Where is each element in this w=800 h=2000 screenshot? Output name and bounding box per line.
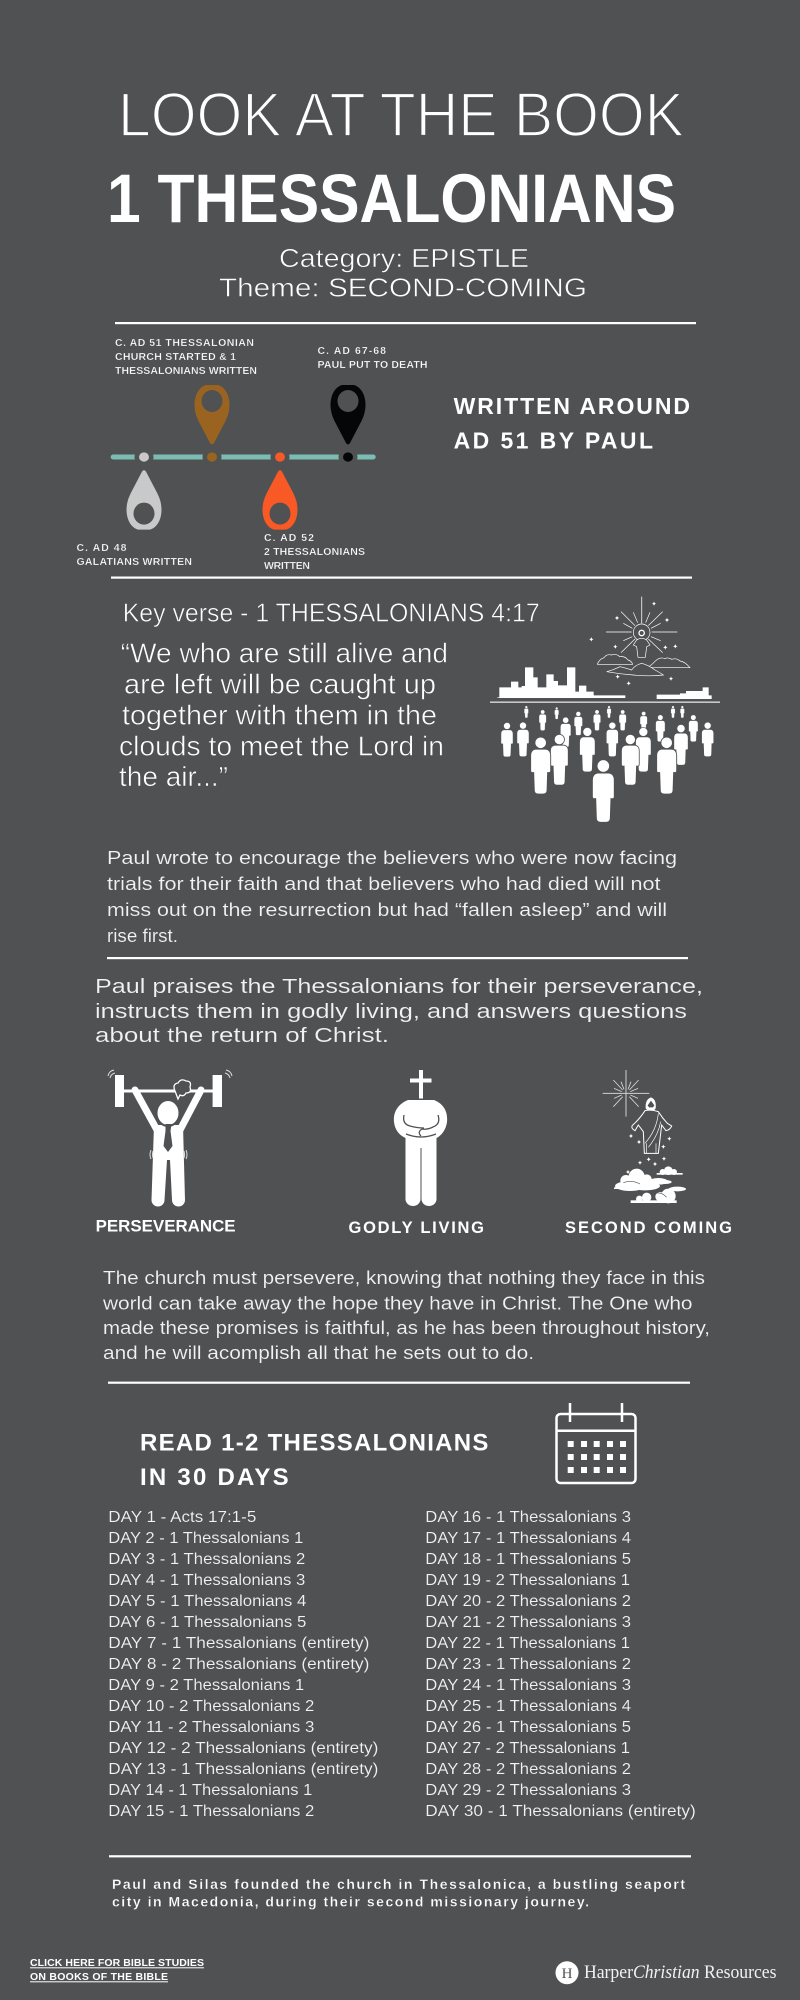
callout: written around AD 51	[454, 393, 690, 454]
reading plan: days 1 to 15: DAY 9 - 2 Thessalonians 1	[108, 1677, 304, 1694]
text: Paul and Silas founded the church: Paul and Silas founded the church in Thessalonica, a bustling seaport	[112, 1876, 685, 1892]
reading plan: days 16 to 30	[425, 1509, 696, 1820]
icon: praying figure with a cross for a head	[394, 1070, 447, 1206]
reading plan: days 1 to 15: DAY 10 - 2 Thessalonians 2	[108, 1698, 314, 1715]
label: godly living: GODLY LIVING	[348, 1219, 484, 1237]
reading plan: days 1 to 15	[108, 1509, 378, 1820]
panel: godly living	[348, 1070, 484, 1237]
reading plan: days 1 to 15: DAY 11 - 2 Thessalonians 3	[108, 1719, 314, 1736]
subtitle: category and theme: Theme: SECOND-COMING	[219, 272, 587, 302]
label: AD 52: 2 THESSALONIANS	[264, 546, 365, 558]
key verse quote: the air...”	[119, 761, 228, 792]
text: the church must persevere: The church must persevere, knowing that nothing they face in this	[103, 1268, 705, 1288]
text: Paul praises the Thessalonians: Paul praises the Thessalonians for their perseverance,	[95, 975, 703, 998]
reading plan: days 1 to 15: DAY 14 - 1 Thessalonians 1	[108, 1782, 312, 1799]
icon: Christ with sun rays and clouds	[597, 597, 690, 676]
text: Paul and Silas founded the church	[112, 1876, 685, 1910]
key verse quote: are left will be caught up	[124, 669, 436, 700]
label: AD 51: CHURCH STARTED & 1	[115, 351, 236, 363]
label: AD 48	[76, 542, 192, 568]
icon: city skyline	[490, 667, 720, 703]
link: click here for Bible studies: CLICK HERE FOR BIBLE STUDIES	[30, 1957, 204, 1969]
reading plan: days 16 to 30: DAY 25 - 1 Thessalonians 4	[425, 1698, 631, 1715]
reading plan: days 1 to 15: DAY 1 - Acts 17:1-5	[108, 1509, 256, 1526]
reading plan: days 16 to 30: DAY 16 - 1 Thessalonians 3	[425, 1509, 631, 1526]
text: why Paul wrote	[107, 848, 677, 946]
text: the church must persevere: world can take away the hope they have in Christ. The One who	[102, 1293, 692, 1313]
reading plan: days 16 to 30: DAY 17 - 1 Thessalonians 4	[425, 1530, 631, 1547]
label: AD 48: GALATIANS WRITTEN	[76, 556, 192, 568]
icon: Christ descending over clouds with a star	[603, 1070, 686, 1203]
title: look at the book: LOOK AT THE BOOK	[118, 81, 684, 150]
reading plan: days 1 to 15: DAY 6 - 1 Thessalonians 5	[108, 1614, 306, 1631]
subtitle: category and theme	[219, 243, 587, 302]
label: AD 67-68	[318, 345, 428, 371]
timeline bar with date dots	[111, 448, 376, 466]
reading plan: days 1 to 15: DAY 2 - 1 Thessalonians 1	[108, 1530, 303, 1547]
reading plan: days 16 to 30: DAY 23 - 1 Thessalonians 2	[425, 1656, 631, 1673]
icon: man lifting a barbell	[108, 1070, 232, 1206]
heading: read in 30 days: READ 1-2 THESSALONIANS	[140, 1430, 488, 1457]
heading: read in 30 days	[140, 1430, 488, 1491]
pin: AD 51 brown	[194, 385, 230, 444]
icon: crowd of people	[501, 706, 714, 822]
label: AD 51	[115, 337, 257, 377]
text: Paul praises the Thessalonians: instructs them in godly living, and answers questions	[95, 1000, 687, 1023]
reading plan: days 16 to 30: DAY 29 - 2 Thessalonians 3	[425, 1782, 631, 1799]
label: AD 67-68: PAUL PUT TO DEATH	[318, 359, 428, 371]
reading plan: days 16 to 30: DAY 22 - 1 Thessalonians 1	[425, 1635, 630, 1652]
label: AD 52: C. AD 52	[264, 532, 314, 544]
text: why Paul wrote: rise first.	[107, 926, 178, 946]
key verse heading: Key verse - 1 THESSALONIANS 4:17	[123, 598, 540, 628]
reading plan: days 1 to 15: DAY 5 - 1 Thessalonians 4	[108, 1593, 306, 1610]
reading plan: days 16 to 30: DAY 28 - 2 Thessalonians 2	[425, 1761, 631, 1778]
text: the church must persevere: and he will acomplish all that he sets out to do.	[103, 1343, 534, 1363]
text: why Paul wrote: trials for their faith and that believers who had died will not	[107, 874, 660, 894]
timeline chart	[76, 337, 428, 572]
reading plan: days 1 to 15: DAY 13 - 1 Thessalonians (entirety)	[108, 1761, 378, 1778]
reading plan: days 16 to 30: DAY 18 - 1 Thessalonians 5	[425, 1551, 631, 1568]
label: perseverance: PERSEVERANCE	[96, 1218, 236, 1236]
label: AD 67-68: C. AD 67-68	[318, 345, 386, 357]
reading plan: days 1 to 15: DAY 12 - 2 Thessalonians (entirety)	[108, 1740, 378, 1757]
text: why Paul wrote: Paul wrote to encourage the believers who were now facing	[107, 848, 677, 868]
reading plan: days 16 to 30: DAY 21 - 2 Thessalonians 3	[425, 1614, 631, 1631]
text: Paul praises the Thessalonians	[95, 975, 703, 1047]
panel: perseverance	[96, 1070, 236, 1236]
reading plan: days 16 to 30: DAY 20 - 2 Thessalonians 2	[425, 1593, 631, 1610]
reading plan: days 16 to 30: DAY 19 - 2 Thessalonians 1	[425, 1572, 630, 1589]
key verse quote: “We who are still alive and	[121, 638, 448, 669]
pin: AD 48 gray	[126, 470, 162, 530]
text: Paul and Silas founded the church: city in Macedonia, during their second missionary journey.	[112, 1894, 589, 1910]
text: Paul praises the Thessalonians: about the return of Christ.	[95, 1024, 389, 1047]
link: click here for Bible studies: ON BOOKS OF THE BIBLE	[30, 1971, 168, 1983]
reading plan: days 1 to 15: DAY 8 - 2 Thessalonians (entirety)	[108, 1656, 369, 1673]
label: AD 52	[264, 532, 365, 572]
text: the church must persevere: made these promises is faithful, as he has been throughout history,	[103, 1318, 710, 1338]
key verse quote	[119, 638, 448, 792]
reading plan: days 16 to 30: DAY 27 - 2 Thessalonians 1	[425, 1740, 630, 1757]
label: AD 51: THESSALONIANS WRITTEN	[115, 365, 257, 377]
pin: AD 52 orange	[262, 470, 298, 530]
callout: written around AD 51: WRITTEN AROUND	[454, 393, 690, 419]
reading plan: days 16 to 30: DAY 30 - 1 Thessalonians (entirety)	[425, 1803, 696, 1820]
label: AD 52: WRITTEN	[264, 560, 310, 572]
reading plan: days 1 to 15: DAY 15 - 1 Thessalonians 2	[108, 1803, 314, 1820]
pin: AD 67-68 black	[330, 385, 366, 444]
callout: written around AD 51: AD 51 BY PAUL	[454, 428, 653, 454]
logo: HarperChristian Resources: HarperChristian Resources	[584, 1962, 776, 1983]
label: AD 51: C. AD 51 THESSALONIAN	[115, 337, 254, 349]
heading: read in 30 days: IN 30 DAYS	[140, 1464, 289, 1491]
subtitle: category and theme: Category: EPISTLE	[279, 243, 529, 273]
text: why Paul wrote: miss out on the resurrection but had “fallen asleep” and will	[107, 900, 667, 920]
panel: second coming	[565, 1070, 732, 1237]
reading plan: days 16 to 30: DAY 26 - 1 Thessalonians 5	[425, 1719, 631, 1736]
text: the church must persevere	[102, 1268, 710, 1363]
icon: calendar	[556, 1403, 636, 1483]
icon: crowd below city and Christ in the clouds	[490, 597, 720, 822]
key verse quote: together with them in the	[122, 699, 437, 730]
logo: HarperChristian Resources: H	[562, 1966, 573, 1982]
reading plan: days 1 to 15: DAY 3 - 1 Thessalonians 2	[108, 1551, 305, 1568]
label: AD 48: C. AD 48	[76, 542, 127, 554]
label: second coming: SECOND COMING	[565, 1219, 732, 1237]
reading plan: days 1 to 15: DAY 4 - 1 Thessalonians 3	[108, 1572, 305, 1589]
heading: 1 Thessalonians: 1 THESSALONIANS	[107, 160, 676, 237]
reading plan: days 1 to 15: DAY 7 - 1 Thessalonians (entirety)	[108, 1635, 369, 1652]
key verse quote: clouds to meet the Lord in	[119, 730, 444, 761]
link: click here for Bible studies	[30, 1957, 204, 1983]
reading plan: days 16 to 30: DAY 24 - 1 Thessalonians 3	[425, 1677, 631, 1694]
